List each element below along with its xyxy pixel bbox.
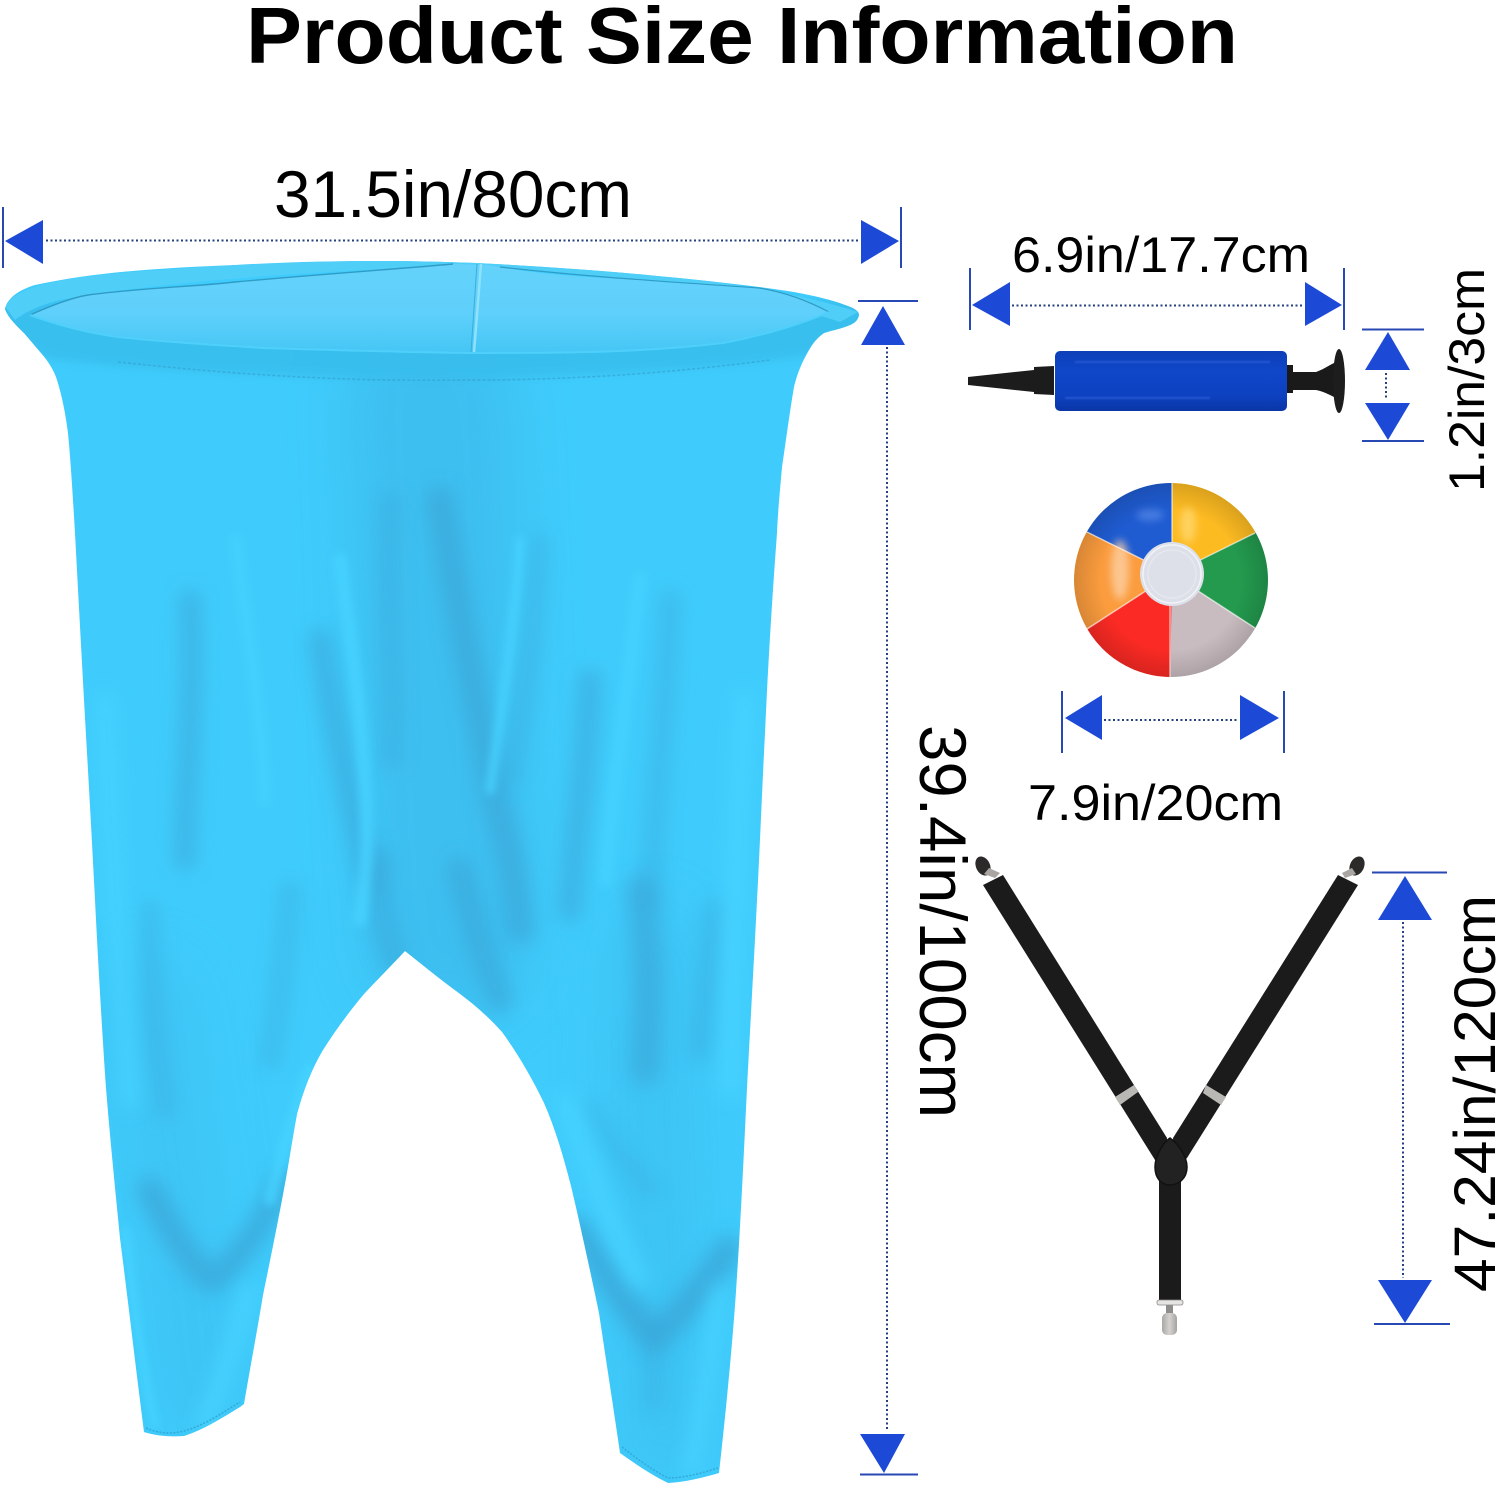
arrow: pump length (970, 268, 1344, 330)
arrow: ball diameter (1062, 691, 1284, 753)
icon: beach ball (1074, 483, 1268, 677)
pants body (0, 255, 870, 1489)
label: pump diameter: 1.2in/3cm (1439, 268, 1495, 492)
label: ball diameter: 7.9in/20cm (1028, 775, 1283, 831)
arrow: pump diameter (1362, 330, 1424, 441)
label: pump length: 6.9in/17.7cm (1012, 227, 1310, 283)
arrow: suspender length (1372, 872, 1450, 1324)
icon: air pump (968, 349, 1345, 413)
pants rim band (0, 300, 870, 378)
label: pants height: 39.4in/100cm (906, 725, 980, 1118)
hems (146, 1402, 240, 1433)
panel: sack race pants product image (0, 255, 870, 1489)
icon: Y-back suspenders (972, 854, 1368, 1335)
arrow: height of pants 39.4in/100cm (858, 301, 918, 1474)
arrow: width of pants 31.5in/80cm (3, 207, 901, 268)
label: pants width: 31.5in/80cm (274, 157, 632, 231)
pants rim opening (30, 264, 829, 353)
